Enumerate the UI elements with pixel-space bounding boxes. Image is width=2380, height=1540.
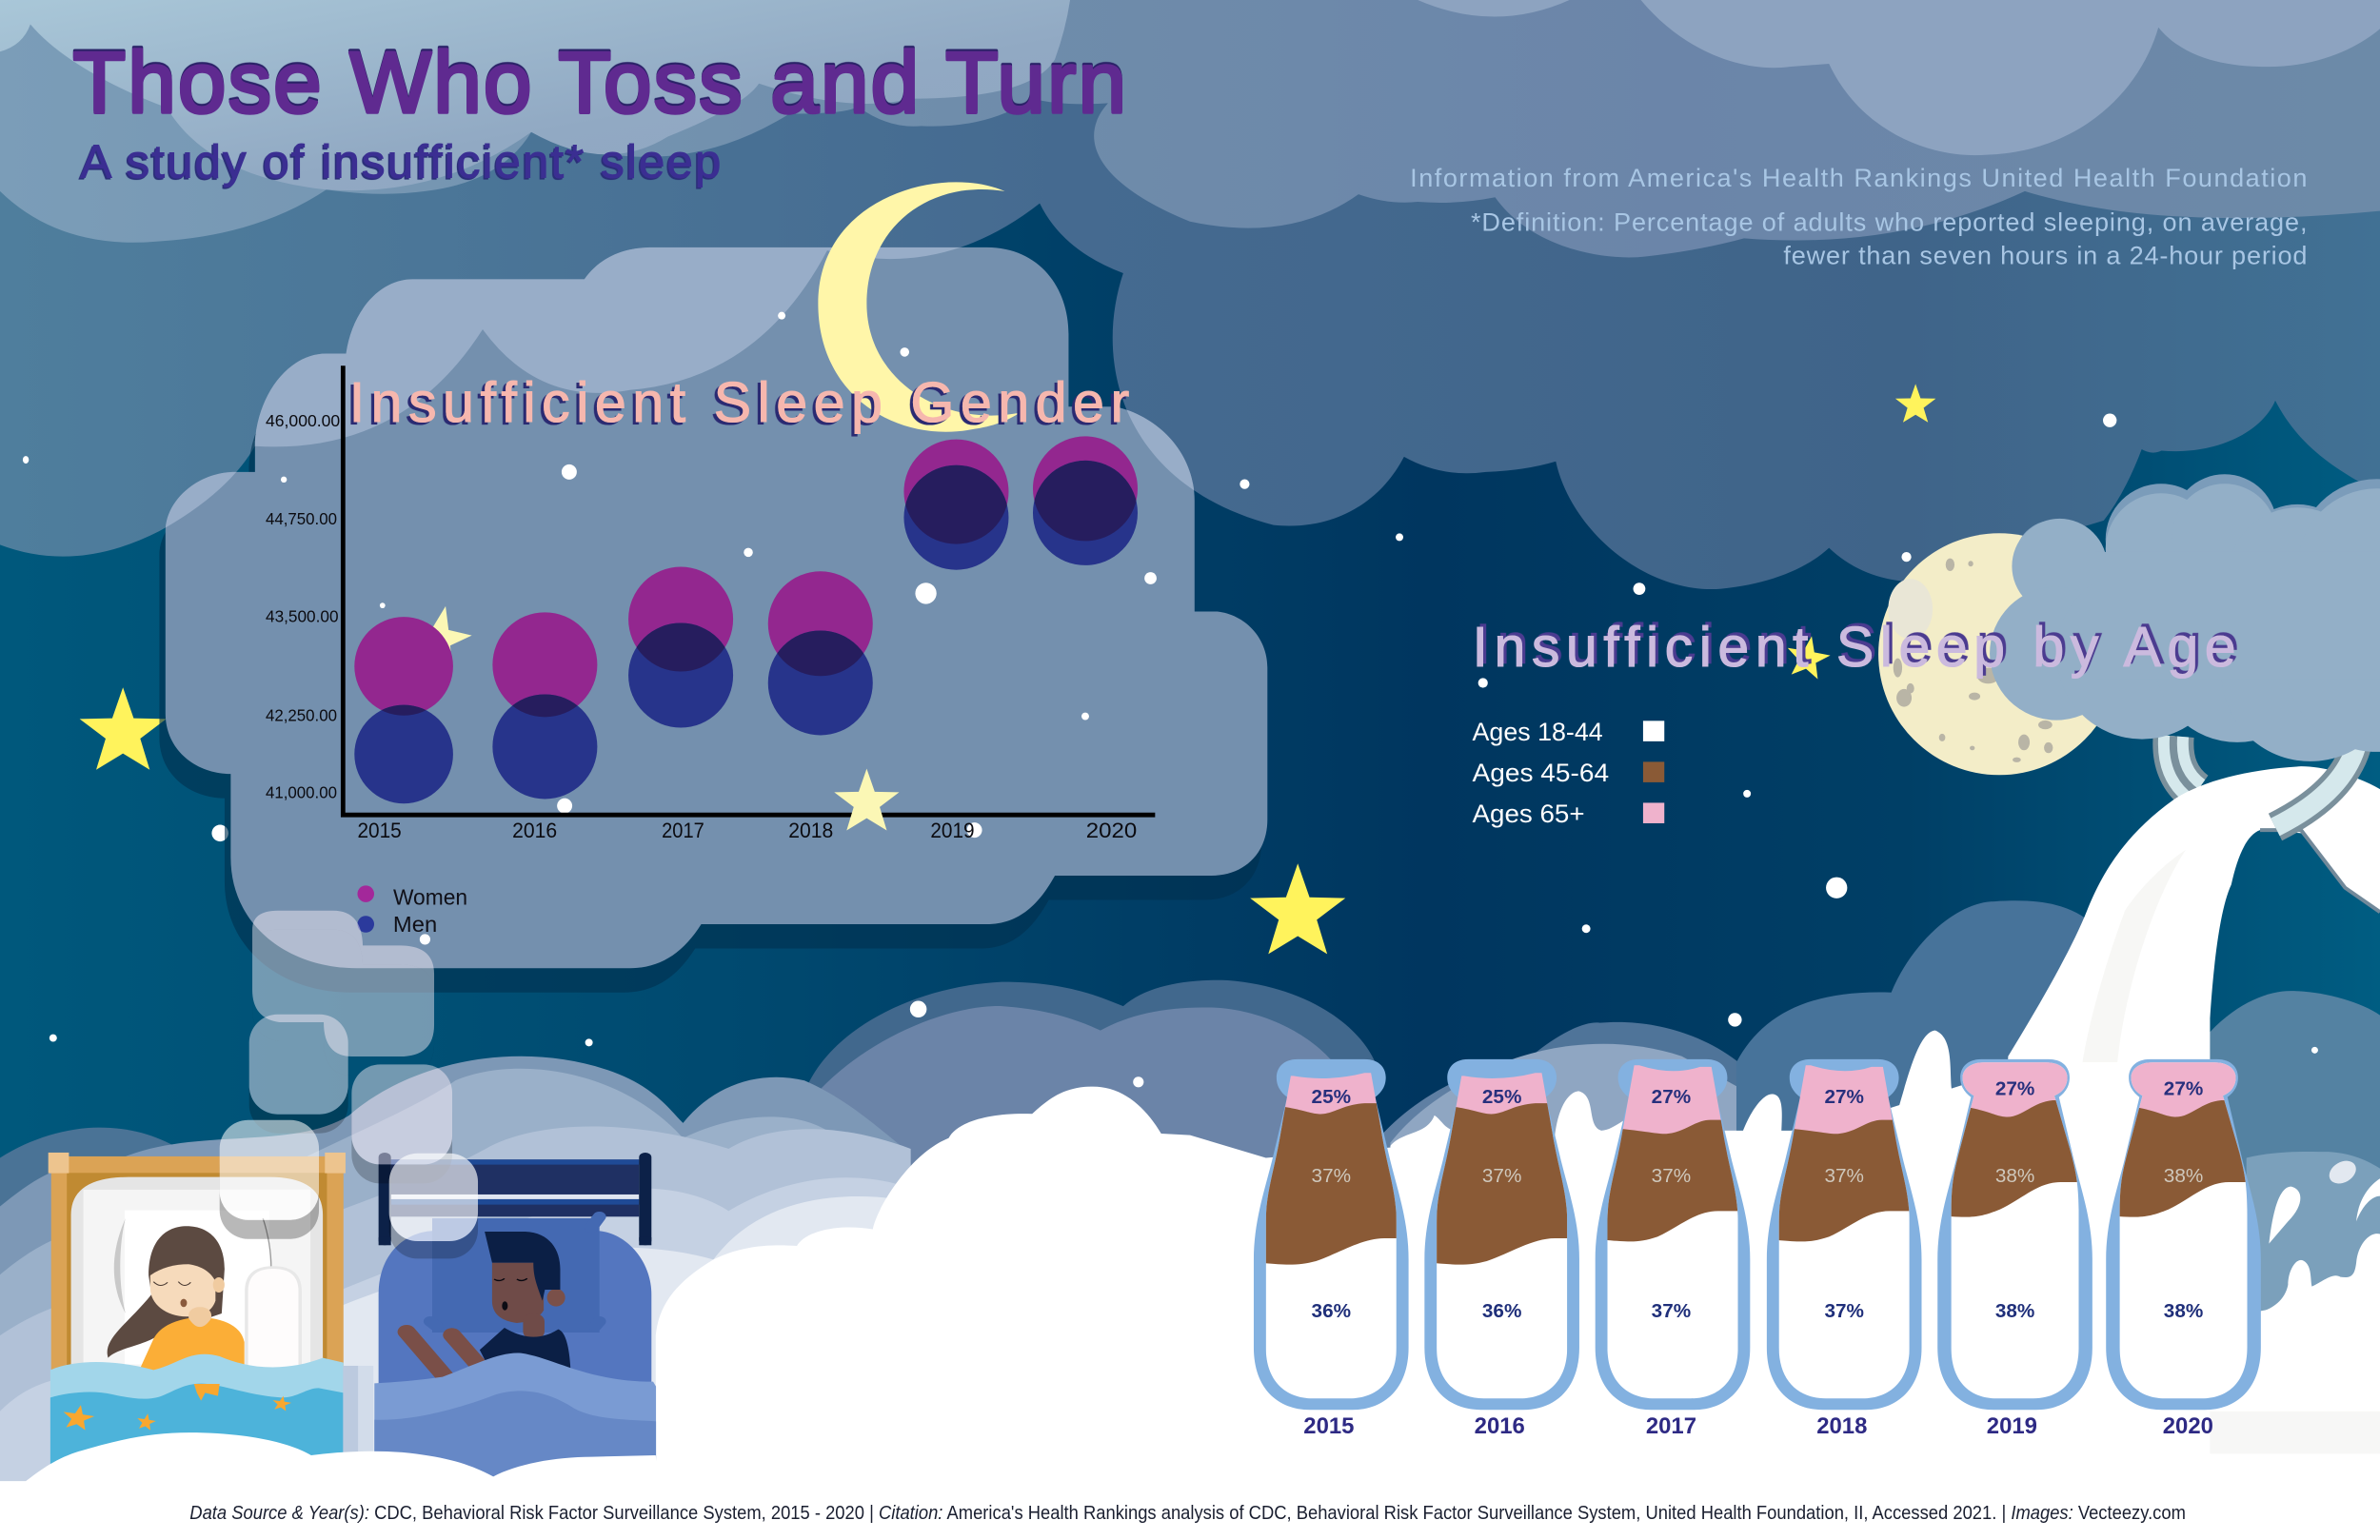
- axis labels: 2016: [512, 819, 557, 842]
- icon: pale star on chart axis: [834, 769, 900, 830]
- icon: moon with craters: [1878, 533, 2120, 775]
- bubble: upper left: [249, 1015, 348, 1134]
- axis labels: 46,000.00: [266, 411, 340, 430]
- bottle: 2020: 27%: [2164, 1077, 2203, 1099]
- axis labels: 2017: [662, 819, 704, 842]
- bubble: over man's bed: [389, 1154, 478, 1258]
- heading: age title: Insufficient Sleep by Age: [1473, 616, 2236, 679]
- bottle: 2017: 37%: [1652, 1165, 1691, 1187]
- icon: star over chart (behind circle): [402, 600, 477, 672]
- bubble: large: [252, 910, 434, 1056]
- source and definition text: Information from America's Health Rankings United Health Foundation: [1410, 163, 2307, 192]
- bottom background clouds: [0, 900, 2380, 1517]
- milk stream and jug: [2004, 736, 2380, 1154]
- top cloud layers: [0, 0, 2380, 589]
- bottle: 2015: 36%: [1312, 1300, 1351, 1322]
- illustration: man sleeping in bed: [374, 1153, 656, 1478]
- axis labels: [266, 411, 1137, 842]
- bottle: 2018: 2018: [1816, 1413, 1867, 1439]
- small dots over panel: [281, 312, 1157, 945]
- bottle: 2017: [1596, 1058, 1750, 1433]
- bottle: 2017: 2017: [1646, 1413, 1696, 1439]
- legend: gender: [357, 884, 467, 937]
- bubble chart: insufficient sleep by gender: [343, 365, 1155, 815]
- bottle: 2019: 38%: [1995, 1165, 2034, 1187]
- bottle: 2016: 37%: [1482, 1165, 1521, 1187]
- axis labels: 2020: [1086, 819, 1137, 842]
- axis labels: 44,750.00: [266, 509, 337, 528]
- thought bubbles: [220, 911, 478, 1258]
- axis labels: 2019: [930, 819, 975, 842]
- bottom white cloud: [0, 1432, 2380, 1540]
- bottle: 2019: [1937, 1058, 2092, 1433]
- bottle: 2016: 36%: [1482, 1300, 1521, 1322]
- bottle: 2019: 38%: [1995, 1300, 2034, 1322]
- bottle: 2020: 38%: [2164, 1300, 2203, 1322]
- legend: gender: Men: [393, 912, 437, 937]
- axis labels: 41,000.00: [266, 783, 337, 802]
- milk splash: [2261, 1156, 2380, 1412]
- bottle: 2018: [1767, 1058, 1921, 1433]
- bottle: 2020: 38%: [2164, 1165, 2203, 1187]
- source and definition text: [1410, 163, 2307, 269]
- bottle: 2015: 25%: [1312, 1086, 1351, 1108]
- bottle: 2018: 37%: [1824, 1165, 1864, 1187]
- bottle: 2017: 27%: [1652, 1086, 1691, 1108]
- bottle: 2019: 2019: [1987, 1413, 2037, 1439]
- faint floor shadow: [2210, 1412, 2380, 1453]
- source and definition text: fewer than seven hours in a 24-hour period: [1783, 240, 2307, 269]
- axis labels: 2018: [788, 819, 833, 842]
- bubble: centre: [351, 1064, 452, 1183]
- bottle: 2015: 37%: [1312, 1165, 1351, 1187]
- bottle: 2015: 2015: [1303, 1413, 1354, 1439]
- bottle: 2019: 27%: [1995, 1077, 2034, 1099]
- axis labels: 2015: [357, 819, 402, 842]
- bottle: 2018: 37%: [1824, 1300, 1864, 1322]
- bottle: 2018: 27%: [1824, 1086, 1864, 1108]
- legend: ages: Ages 45-64: [1473, 758, 1609, 787]
- bottle: 2016: [1424, 1058, 1579, 1433]
- small white stars / dots: [23, 413, 2318, 1087]
- illustration: woman sleeping in bed: [49, 1153, 346, 1466]
- bottle: 2017: 37%: [1652, 1300, 1691, 1322]
- icon: small yellow star right: [1895, 384, 1935, 423]
- bottle: 2016: 2016: [1475, 1413, 1525, 1439]
- white cloud and milk pool: [656, 1031, 2380, 1540]
- legend: ages: [1473, 717, 1664, 828]
- bottle: 2016: 25%: [1482, 1086, 1521, 1108]
- icon: crescent moon: [818, 182, 1020, 432]
- icon: cloud over moon: [1990, 474, 2380, 761]
- legend: ages: Ages 65+: [1473, 799, 1585, 828]
- footer citation: Data Source & Year(s): CDC, Behavioral Risk Factor Surveillance System, 2015 - 2020 | Citation: America's Health Rankings analysis of CDC, Behavioral Risk Factor Surveillance System, United Health Foundation, II, Accessed 2021. | Images: Vecteezy.com: [189, 1502, 2186, 1524]
- strip between beds: [343, 1366, 358, 1472]
- icon: star over age title: [1783, 632, 1833, 681]
- bubble: over woman's bed: [220, 1120, 319, 1239]
- axis labels: 43,500.00: [266, 607, 339, 626]
- axis labels: 42,250.00: [266, 705, 337, 724]
- legend: gender: Women: [393, 884, 467, 909]
- icon: large yellow star centre: [1250, 863, 1345, 954]
- panel: thought cloud gender chart: [159, 247, 1268, 993]
- heading: gender chart title: Insufficient Sleep Gender: [349, 371, 1129, 434]
- icon: large yellow star left: [80, 687, 167, 770]
- bottle: 2015: [1253, 1058, 1409, 1433]
- title: Those Who Toss and Turn: [73, 35, 1126, 131]
- bottle: 2020: [2106, 1058, 2261, 1433]
- subtitle: A study of insufficient* sleep: [81, 136, 721, 188]
- legend: ages: Ages 18-44: [1473, 717, 1603, 746]
- bottle: 2020: 2020: [2163, 1413, 2213, 1439]
- source and definition text: *Definition: Percentage of adults who reported sleeping, on average,: [1471, 207, 2307, 236]
